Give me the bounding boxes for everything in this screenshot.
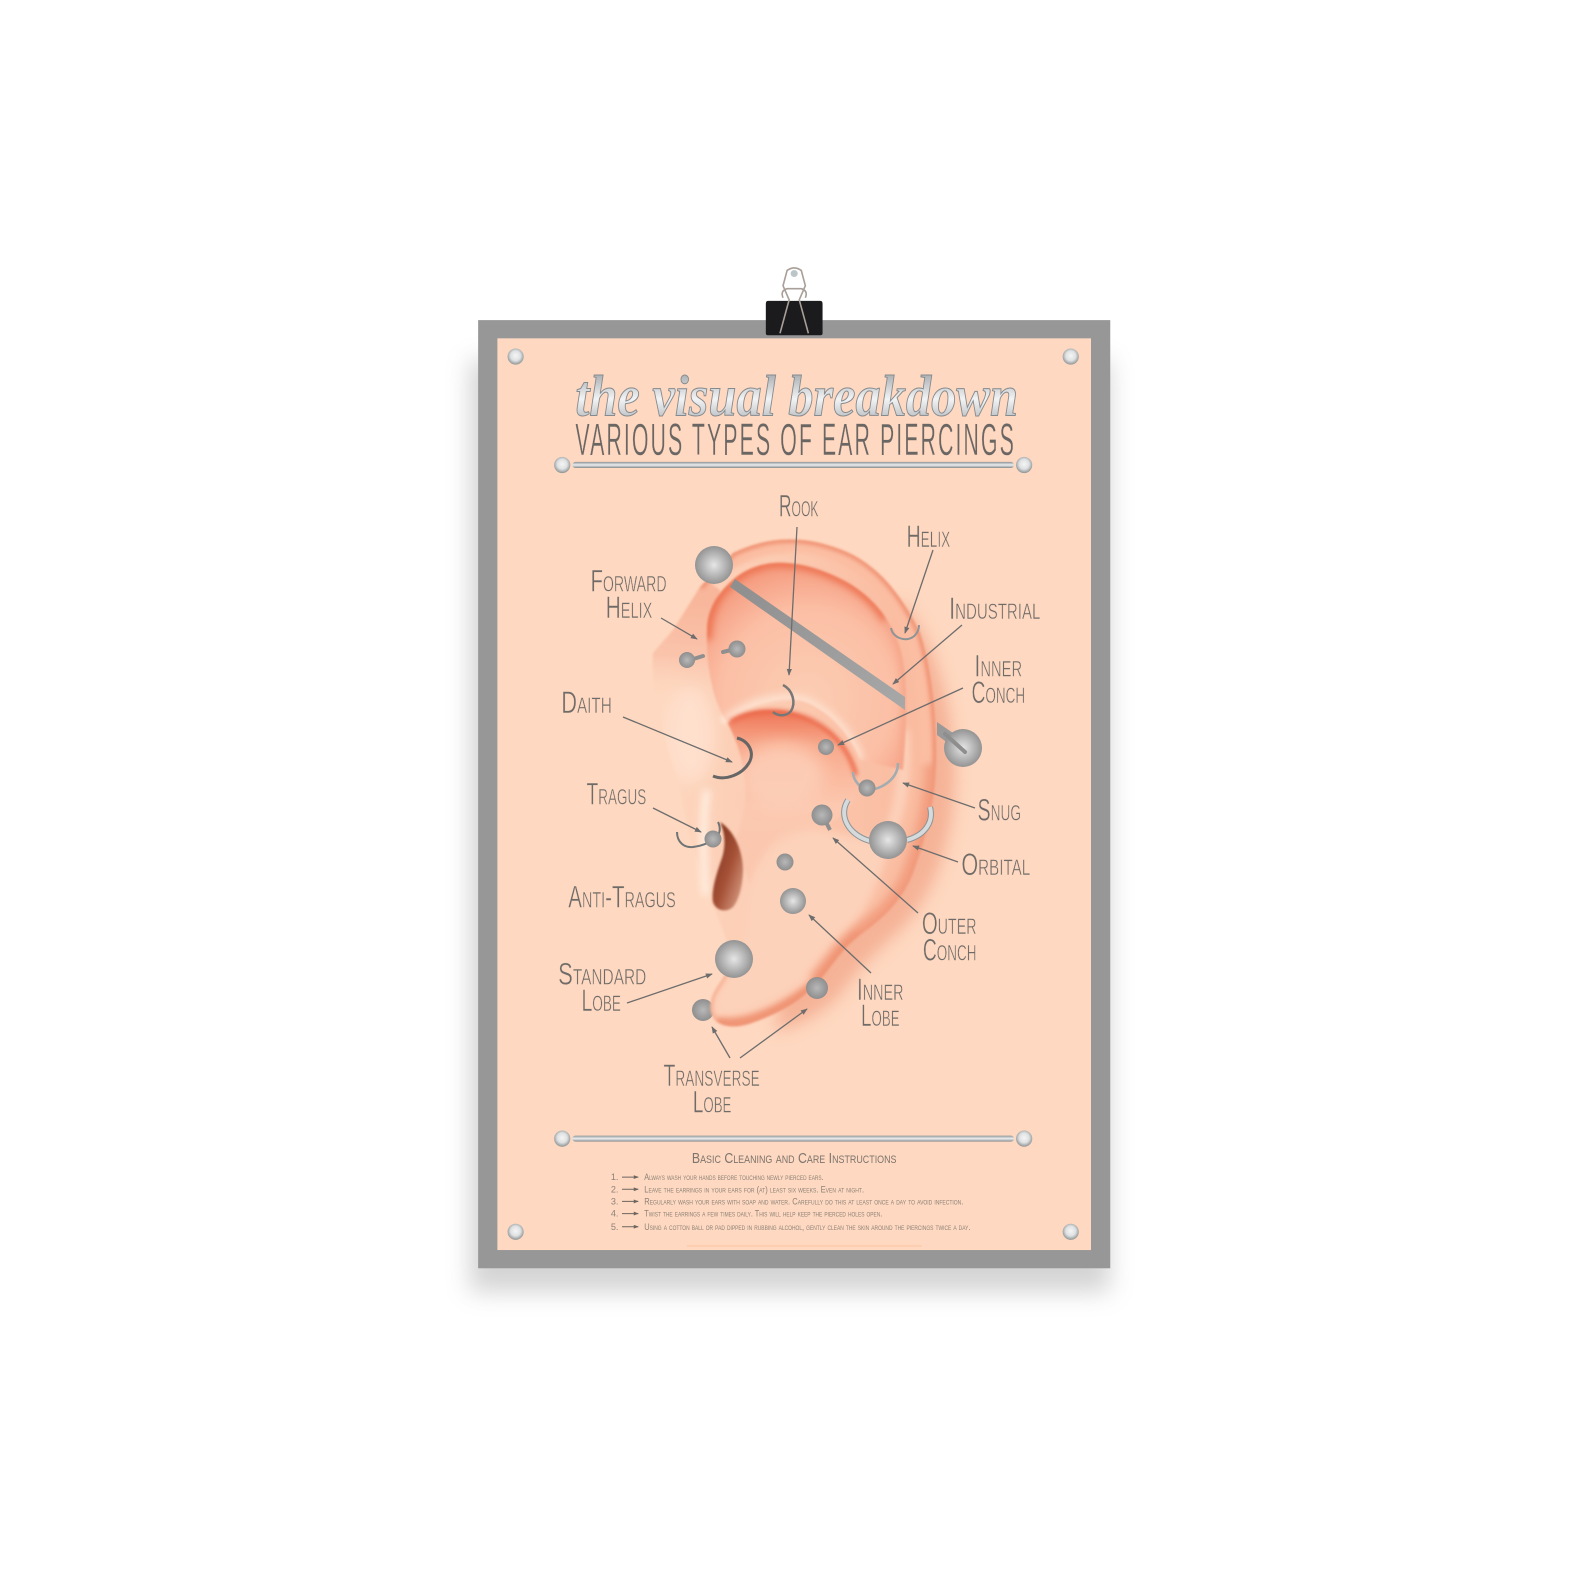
corner screws: [508, 348, 1079, 1240]
label: industrial: Industrial: [949, 591, 1040, 626]
upper rim tint: [732, 544, 827, 570]
arrow: inner lobe: [809, 915, 871, 973]
care heading: Basic Cleaning and Care Instructions: [692, 1150, 897, 1167]
care numbers: 2.: [611, 1184, 618, 1194]
helix hoop: [891, 625, 919, 639]
title subtitle: VARIOUS TYPES OF EAR PIERCINGS: [575, 414, 1014, 465]
label: outer conch: Outer: [922, 906, 977, 941]
forward helix studs: [679, 640, 746, 668]
care numbers: [611, 1172, 618, 1232]
arrow: daith: [623, 717, 732, 762]
label: daith: Daith: [561, 685, 612, 720]
care text lines: Using a cotton ball or pad dipped in rubbing alcohol, gently clean the skin around the piercings twice a day.: [644, 1222, 970, 1232]
binder clip: [766, 268, 823, 335]
care text lines: Twist the earrings a few times daily. This will help keep the pierced holes open.: [644, 1209, 882, 1219]
industrial barbell: [695, 546, 982, 767]
clip wire handles: [780, 268, 808, 333]
lower right broad shading: [817, 765, 936, 983]
arrow: industrial: [893, 625, 962, 684]
barbell top ball: [695, 546, 733, 584]
ear canal: [713, 822, 743, 910]
label: standard lobe: Lobe: [581, 983, 621, 1018]
label: inner lobe: Inner: [857, 972, 904, 1007]
label: transverse lobe: [664, 1058, 760, 1119]
anti-tragus stud: [776, 854, 794, 870]
left face blend: [630, 640, 674, 910]
poster: [478, 268, 1110, 1268]
poster grey frame: [478, 320, 1110, 1268]
inner conch stud: [818, 739, 834, 755]
barbell lower ball: [944, 729, 982, 767]
label: forward helix: Forward: [591, 564, 667, 599]
lobe: [777, 830, 887, 992]
piercing labels: [558, 489, 1040, 1119]
care text lines: Leave the earrings in your ears for (at) least six weeks. Even at night.: [644, 1184, 864, 1194]
scapha top shadow: [707, 563, 887, 640]
arrow: transverse lobe front: [712, 1027, 730, 1058]
snug barbell: [853, 763, 898, 796]
care text lines: Always wash your hands before touching newly pierced ears.: [644, 1172, 824, 1182]
label: inner conch: [971, 649, 1025, 710]
label: helix: Helix: [907, 519, 950, 554]
pale face-side highlight: [666, 687, 714, 783]
tragus ring: [677, 822, 722, 848]
lower fold highlight: [725, 699, 860, 760]
outer conch stud: [812, 804, 832, 830]
rook hoop: [773, 685, 793, 715]
antihelix ridge: [885, 730, 904, 845]
bottom barbell divider: [554, 1131, 1032, 1147]
label: anti-tragus: Anti-Tragus: [568, 880, 676, 915]
arrow: transverse lobe back: [740, 1009, 807, 1058]
care text lines: Regularly wash your ears with soap and water. Carefully do this at least once a day to avoid infection.: [644, 1196, 963, 1206]
arrow: snug: [903, 783, 975, 808]
scapha hollow: [706, 561, 906, 770]
standard lobe stud: [715, 940, 753, 978]
arrow: standard lobe: [627, 974, 712, 1003]
title script: the visual breakdown: [575, 363, 1018, 428]
label: transverse lobe: Lobe: [693, 1084, 731, 1119]
label: tragus: Tragus: [587, 776, 646, 811]
outer rim shading: [700, 539, 936, 1026]
clip body: [766, 301, 823, 335]
care numbers: 4.: [611, 1209, 618, 1219]
daith hoop: [713, 738, 751, 778]
arrow: helix: [905, 550, 933, 633]
care text lines: [644, 1172, 970, 1232]
arrow: rook: [789, 527, 797, 675]
label: standard lobe: Standard: [558, 957, 646, 992]
top barbell divider: [554, 457, 1032, 473]
transverse lobe ball back: [806, 977, 828, 999]
upper left rim tint: [652, 584, 720, 672]
scapha right shadow: [890, 630, 906, 746]
label: inner conch: Inner: [975, 649, 1022, 684]
scapha fill: [706, 562, 905, 770]
label: standard lobe: [558, 957, 646, 1018]
care numbers: 3.: [611, 1196, 618, 1206]
arrow: forward helix: [661, 618, 697, 639]
inner lobe stud: [780, 888, 806, 914]
faint footer line: [687, 1245, 922, 1247]
care numbers: 5.: [611, 1222, 618, 1232]
label: outer conch: [922, 906, 977, 967]
label: snug: Snug: [978, 793, 1021, 828]
orbital ring: [844, 800, 931, 859]
label: transverse lobe: Transverse: [664, 1058, 760, 1093]
ear illustration: [623, 520, 982, 1058]
arrow: inner conch: [838, 688, 963, 745]
lobe edge: [716, 976, 818, 1025]
ear body: [652, 538, 937, 1028]
care arrows: [622, 1177, 638, 1227]
antihelix crus light fold: [720, 698, 791, 725]
arrow: orbital: [913, 846, 958, 862]
label: outer conch: Conch: [923, 932, 977, 967]
concha lower light: [740, 743, 824, 807]
label: inner lobe: Lobe: [861, 998, 900, 1033]
arrow: outer conch: [833, 838, 918, 913]
poster peach panel: [497, 338, 1091, 1250]
arrow: tragus: [653, 808, 701, 832]
label: forward helix: [591, 564, 667, 625]
label: rook: Rook: [779, 489, 819, 524]
barbell bar back: [937, 722, 966, 752]
care instructions: [611, 1150, 970, 1232]
lobe left edge: [710, 975, 728, 1020]
poster drop shadow: [470, 360, 1110, 1292]
label: forward helix: Helix: [606, 590, 653, 625]
concha: [727, 709, 852, 794]
ear skin: [710, 552, 920, 1016]
transverse lobe ball behind ear: [692, 999, 714, 1021]
label: orbital: Orbital: [961, 847, 1030, 882]
label: inner conch: Conch: [971, 675, 1025, 710]
leader arrows: [623, 527, 975, 1058]
label: inner lobe: [857, 972, 904, 1033]
ear cast shadow: [775, 600, 955, 1032]
barbell bar front: [730, 579, 905, 710]
concha red top edge: [730, 712, 856, 775]
care numbers: 1.: [611, 1172, 618, 1182]
tragus highlight: [704, 790, 707, 895]
